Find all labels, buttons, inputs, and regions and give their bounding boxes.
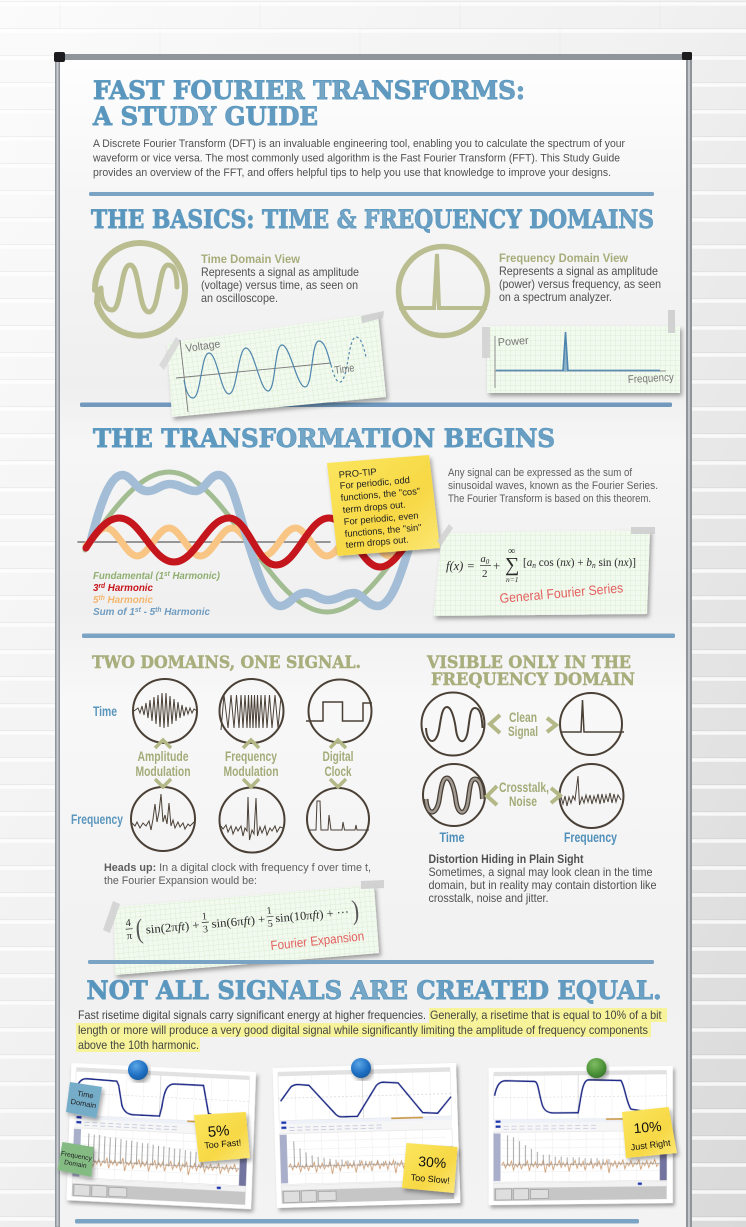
text: time domain view: an oscilloscope. [201, 292, 278, 305]
sticky note: pro-tip: term drops out. [345, 534, 409, 550]
text: frequency domain view: (power) versus frequency, as seen [499, 278, 661, 291]
heading: visible only in the frequency domain: VISIBLE ONLY IN THE [426, 653, 631, 672]
text: distortion hiding in plain sight: Sometimes, a signal may look clean in the time [428, 866, 652, 879]
text: time domain view: (voltage) versus time, as seen on [201, 279, 358, 292]
photo: 30% risetime scope capture [273, 1058, 460, 1208]
highlighted paragraph: Generally, a risetime that is equal to 10% of a bit [430, 1009, 662, 1022]
text: time domain view [201, 254, 359, 305]
text: distortion hiding in plain sight: domain, but in reality may contain distortion like [428, 879, 656, 892]
equation: [a [523, 555, 533, 569]
equation [446, 546, 636, 584]
equation: 4 [125, 918, 132, 929]
equation: nx)] [618, 555, 637, 569]
sticky note: pro-tip: functions, the "sin" [344, 521, 422, 539]
note: time domain: Time [77, 1089, 94, 1100]
legend: Fundamental (1 [93, 571, 170, 582]
sticky note: pro-tip: PRO-TIP [338, 466, 377, 480]
note: frequency domain [58, 1142, 94, 1177]
photo: 10% risetime scope capture [489, 1058, 673, 1205]
equation: 1 [201, 911, 207, 923]
equation: sin(2πft) + [145, 918, 200, 936]
equation: sin ( [596, 555, 618, 569]
equation: ( [134, 914, 144, 945]
equation: 3 [203, 924, 208, 936]
note: frequency domain: Domain [63, 1159, 87, 1170]
text: fourier series explanation: sinusoidal waves, known as the Fourier Series. [448, 480, 658, 492]
sticky note: 5% too fast [194, 1112, 250, 1162]
legend: th [155, 607, 161, 614]
sticky note: 30% too slow [402, 1143, 458, 1193]
signal type labels [136, 749, 354, 779]
title: A STUDY GUIDE [92, 102, 318, 132]
legend: Harmonic) [170, 571, 220, 582]
sum of harmonics wave [91, 475, 414, 606]
graph paper: power vs frequency [482, 310, 680, 393]
text: time domain view: Time Domain View [201, 254, 300, 266]
intro paragraph [92, 138, 625, 179]
sticky note: pro-tip: functions, the "cos" [340, 485, 420, 503]
text: fourier series explanation: The Fourier Transform is based on this theorem. [448, 493, 651, 505]
legend: rd [98, 583, 106, 590]
legend: st [135, 607, 141, 614]
noisy signal circles [423, 764, 624, 828]
legend: Harmonic [105, 595, 153, 606]
signal type labels: Digital [322, 749, 354, 764]
text: heads up [104, 862, 371, 887]
legend: 5 [93, 595, 99, 606]
sticky note: 5% too fast: 5% [207, 1122, 230, 1141]
legend: - 5 [141, 607, 155, 618]
equation: ∑ [505, 554, 519, 576]
row labels: time and frequency: Frequency [71, 812, 123, 827]
text: frequency domain view [499, 253, 661, 304]
sticky note: 10% just right: Just Right [630, 1138, 672, 1152]
equation: n=1 [506, 575, 519, 584]
graph paper: power vs frequency: Power [497, 335, 529, 349]
highlighted paragraph: Fast risetime digital signals carry significant energy at higher frequencies. [78, 1009, 426, 1022]
column labels: time and frequency: Frequency [564, 830, 617, 845]
text: distortion hiding in plain sight: crosstalk, noise and jitter. [428, 892, 548, 905]
legend: 3 [93, 583, 99, 594]
intro paragraph: waveform or vice versa. The most commonly used algorithm is the Fast Fourier Transform (FFT). This Study Guide [92, 152, 620, 164]
graph paper: fourier expansion: Fourier Expansion [270, 928, 365, 953]
text: distortion hiding in plain sight [428, 853, 656, 905]
equation: 1 [266, 906, 272, 917]
equation: nx) + b [560, 555, 592, 569]
equation: 2 [482, 568, 488, 580]
text: fourier series explanation [448, 467, 658, 505]
heading: the basics: THE BASICS: TIME & FREQUENCY DOMAINS [91, 205, 654, 235]
signal type labels: Clock [324, 764, 352, 779]
equation: + [493, 559, 500, 573]
chevrons between circles [155, 740, 346, 787]
heading: the transformation begins: THE TRANSFORMATION BEGINS [93, 424, 555, 454]
pin: green [586, 1058, 606, 1078]
graph paper: fourier expansion [103, 880, 384, 975]
equation: sin(10πft) + ··· [275, 905, 350, 925]
note: frequency domain: Frequency [60, 1150, 93, 1163]
digital clock circles [306, 680, 372, 850]
sticky note: 30% too slow: Too Slow! [410, 1172, 450, 1186]
heading: visible only in the frequency domain [426, 653, 635, 689]
legend: Harmonic [105, 583, 153, 594]
equation: f(x) = [446, 559, 475, 573]
text: frequency domain view: Represents a signal as amplitude [499, 265, 658, 278]
column labels: time and frequency [440, 830, 617, 845]
signal type labels: Modulation [224, 764, 278, 779]
highlighted paragraph [76, 1008, 667, 1052]
legend: st [164, 571, 170, 578]
sticky note: pro-tip: For periodic, even [343, 509, 419, 527]
pin: blue [351, 1058, 371, 1078]
equation: sin(6πft) + [211, 912, 266, 931]
frequency modulation circles [220, 679, 284, 852]
chart: harmonic waves [78, 472, 414, 612]
amplitude modulation circles [131, 679, 197, 851]
intro paragraph: provides an overview of the FFT, and offers helpful tips to help you use that knowledge to improve your designs. [93, 167, 611, 179]
divider [80, 402, 672, 407]
row labels: time and frequency [71, 704, 123, 827]
equation: ) [351, 895, 360, 926]
graph paper: voltage vs time [159, 311, 386, 417]
sticky note: pro-tip [327, 455, 440, 556]
title [92, 76, 525, 132]
title: FAST FOURIER TRANSFORMS: [93, 76, 525, 106]
highlighted paragraph: length or more will produce a very good digital signal while significantly limiting the amplitude of frequency components [78, 1024, 648, 1037]
signal type labels: Amplitude [138, 749, 189, 764]
sticky note: 10% just right: 10% [633, 1118, 662, 1136]
labels: clean signal, crosstalk noise: Signal [508, 724, 538, 739]
text: fourier series explanation: Any signal can be expressed as the sum of [448, 467, 633, 479]
graph paper: power vs frequency: Frequency [628, 372, 675, 386]
graph paper: voltage vs time: Voltage [185, 338, 221, 355]
equation: cos ( [536, 555, 560, 569]
legend: Sum of 1 [93, 607, 137, 618]
graph paper: voltage vs time: Time [334, 362, 355, 377]
heading: not all signals are created equal: NOT ALL SIGNALS ARE CREATED EQUAL. [86, 976, 662, 1006]
heading: visible only in the frequency domain: FREQUENCY DOMAIN [431, 670, 635, 689]
labels: clean signal, crosstalk noise [499, 710, 549, 809]
equation: a [480, 554, 486, 565]
equation [124, 895, 360, 946]
labels: clean signal, crosstalk noise: Noise [509, 794, 537, 809]
divider [82, 634, 675, 638]
clean signal circles [422, 692, 624, 756]
graph paper: general fourier series [434, 524, 655, 616]
text: heads up: Heads up: In a digital clock with frequency f over time t, [104, 862, 371, 874]
equation: ∞ [508, 546, 515, 557]
intro paragraph: A Discrete Fourier Transform (DFT) is an invaluable engineering tool, enabling you to calculate the spectrum of your [93, 138, 625, 150]
column labels: time and frequency: Time [440, 830, 465, 845]
signal type labels: Frequency [225, 749, 277, 764]
note: time domain [66, 1082, 102, 1118]
equation: n [592, 561, 596, 570]
text: time domain view: Represents a signal as amplitude [201, 266, 359, 279]
highlighted paragraph: above the 10th harmonic. [78, 1039, 199, 1052]
fundamental wave [85, 472, 406, 612]
divider [89, 192, 654, 196]
labels: clean signal, crosstalk noise: Clean [509, 710, 537, 725]
text: distortion hiding in plain sight: Distortion Hiding in Plain Sight [428, 853, 584, 866]
text: frequency domain view: on a spectrum analyzer. [499, 291, 612, 304]
photo: 5% risetime scope capture [67, 1060, 256, 1209]
sticky note: pro-tip: For periodic, odd [339, 474, 410, 491]
graph paper: general fourier series: General Fourier Series [499, 580, 624, 606]
legend: Harmonic [161, 607, 210, 618]
row labels: time and frequency: Time [93, 704, 117, 719]
equation: n [532, 561, 536, 570]
icon: frequency domain circle [398, 246, 488, 336]
sticky note: 5% too fast: Too Fast! [204, 1137, 242, 1151]
pin: blue [128, 1060, 148, 1080]
text: heads up: the Fourier Expansion would be: [104, 875, 257, 887]
text: frequency domain view: Frequency Domain View [499, 253, 628, 265]
heading: two domains, one signal: TWO DOMAINS, ONE SIGNAL. [92, 653, 361, 672]
sticky note: pro-tip: term drops out. [342, 499, 406, 515]
note: time domain: Domain [70, 1097, 97, 1110]
divider [88, 960, 654, 964]
legend [93, 571, 220, 618]
divider [75, 1219, 639, 1224]
equation: π [126, 931, 133, 942]
labels: clean signal, crosstalk noise: Crosstalk, [499, 780, 549, 795]
5th harmonic wave [86, 528, 406, 556]
sticky note: 10% just right [622, 1107, 677, 1158]
icon: time domain circle [95, 243, 185, 336]
sticky note: 30% too slow: 30% [418, 1153, 447, 1171]
equation: 0 [486, 558, 490, 566]
signal type labels: Modulation [136, 764, 190, 779]
chevrons beside labels [487, 715, 560, 805]
legend: th [98, 595, 105, 602]
3rd harmonic wave [86, 518, 406, 567]
equation: 5 [267, 918, 273, 930]
